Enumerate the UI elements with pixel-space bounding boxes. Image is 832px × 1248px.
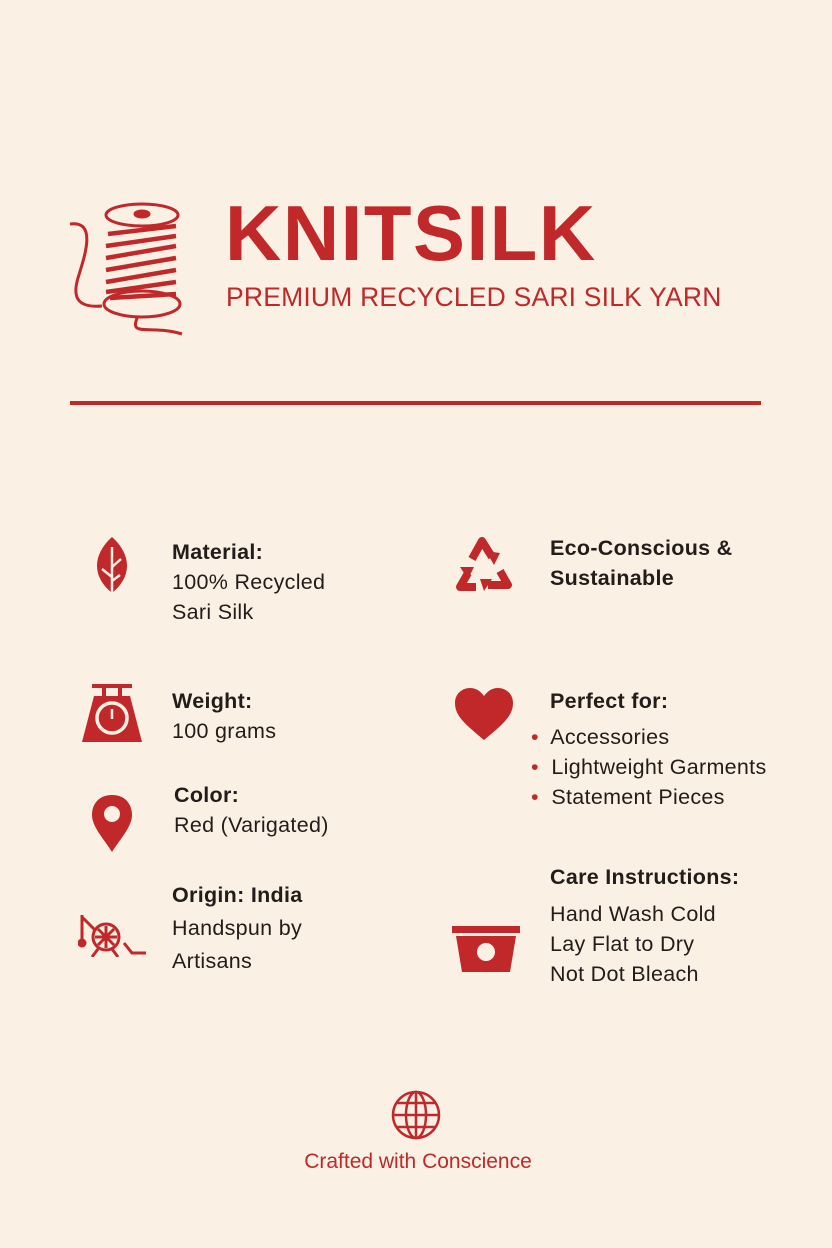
text: weight <box>172 689 276 743</box>
icon: thread spool <box>70 202 182 336</box>
text: origin: Origin: India <box>172 883 303 907</box>
list: uses: • Accessories <box>531 725 669 749</box>
footer: tagline: Crafted with Conscience <box>304 1150 532 1173</box>
panel: care <box>452 865 739 986</box>
panel: weight <box>82 684 276 743</box>
text: weight: 100 grams <box>172 719 276 743</box>
text: eco <box>550 536 732 590</box>
icon: heart <box>455 688 513 740</box>
text: color: Color: <box>174 783 239 807</box>
panel: material <box>97 537 325 624</box>
icon: wash basin <box>452 926 520 972</box>
text: material: Sari Silk <box>172 600 254 624</box>
text: material: 100% Recycled <box>172 570 325 594</box>
list: uses <box>531 725 767 809</box>
icon: leaf <box>97 537 127 592</box>
icon: spinning wheel <box>78 915 146 957</box>
text: eco: Sustainable <box>550 566 674 590</box>
text: color <box>174 783 329 837</box>
text: care <box>550 865 739 986</box>
text: color: Red (Varigated) <box>174 813 329 837</box>
icon: scale <box>82 684 142 742</box>
divider <box>70 401 761 405</box>
text: care: Lay Flat to Dry <box>550 932 694 956</box>
panel: color <box>92 783 329 852</box>
panel: eco <box>456 536 732 591</box>
subtitle: PREMIUM RECYCLED SARI SILK YARN <box>226 282 722 312</box>
panel: perfect for <box>455 688 767 809</box>
icon: location pin <box>92 795 132 852</box>
text: care: Care Instructions: Hand Wash Cold <box>550 865 739 926</box>
text: eco: Eco-Conscious & <box>550 536 732 560</box>
text: care: Not Dot Bleach <box>550 962 699 986</box>
text: origin: Artisans <box>172 949 252 973</box>
text: material: Material: <box>172 540 263 564</box>
text: origin: Handspun by <box>172 916 302 940</box>
title: KNITSILK <box>225 189 597 277</box>
text: weight: Weight: <box>172 689 253 713</box>
panel: origin <box>78 883 303 973</box>
list: uses: • Statement Pieces <box>531 785 725 809</box>
text: origin <box>172 883 303 973</box>
footer: globe icon <box>392 1090 440 1140</box>
list: uses: • Lightweight Garments <box>531 755 767 779</box>
text: material <box>172 540 325 624</box>
text: perfect for: Perfect for: <box>550 689 668 713</box>
icon: recycle <box>456 537 512 591</box>
